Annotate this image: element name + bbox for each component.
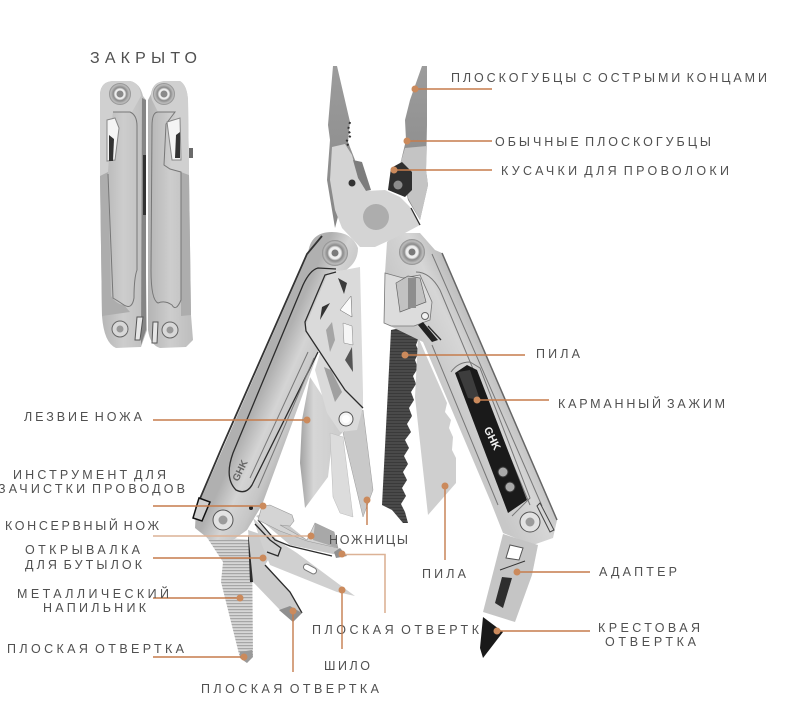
scissors frame [305,267,363,432]
left handle [195,232,358,540]
heading: closed state: ЗАКРЫТО [90,50,197,67]
closed top left rivet [109,83,131,105]
closed left latch [135,317,143,340]
callout: wire stripper: ЗАЧИСТКИ ПРОВОДОВ [0,482,185,496]
right jaw light section [400,146,428,220]
pocket clip [455,365,527,513]
right jaw [400,66,428,220]
closed multitool [100,81,193,348]
saw blade [382,325,419,523]
awl tool [253,518,355,596]
callout: phillips screwdriver [494,621,700,649]
wire cutter [388,162,412,197]
label text under tool: ПЛОСКАЯ ОТВЕРТК [312,623,480,637]
callout: phillips screwdriver: КРЕСТОВАЯ [598,621,700,635]
callout: wire cutters [390,164,729,178]
left base screw and latch [193,498,253,530]
file tool [206,535,253,663]
opened multitool [193,66,557,663]
callout: awl: ШИЛО [324,659,370,673]
callout: adapter [514,565,677,579]
callout: flat screwdriver left: ПЛОСКАЯ ОТВЕРТКА [7,642,185,656]
callout: metal file [17,586,244,615]
callout: serrated blade: ПИЛА [422,567,467,581]
left jaw teeth [346,122,351,148]
callout: scissors [329,496,408,547]
right base screw and latch [520,503,554,532]
callout: bottle opener: ОТКРЫВАЛКА [25,543,141,557]
scissors pivot [339,412,353,426]
closed bottom left screw [112,321,128,337]
clip logo: GHK [481,425,502,452]
serrated blade [415,337,456,515]
callout: regular pliers: ОБЫЧНЫЕ ПЛОСКОГУБЦЫ [495,135,711,149]
saw holder bracket [384,273,438,342]
scissors left blade [330,433,353,517]
callout: wire cutters: КУСАЧКИ ДЛЯ ПРОВОЛОКИ [501,164,729,178]
callout: awl [324,586,370,673]
clip screw one [498,467,508,477]
adapter [483,534,538,622]
callout: knife blade [24,410,310,424]
callout: scissors: НОЖНИЦЫ [329,533,408,547]
callout: can opener: КОНСЕРВНЫЙ НОЖ [5,518,159,533]
callout: pocket clip [474,396,725,411]
closed right half [148,81,193,348]
knife blade [300,377,345,508]
scissors right blade [343,410,373,517]
closed bottom right screw [162,322,178,338]
callout: flat screwdriver bottom: ПЛОСКАЯ ОТВЕРТКА [201,682,380,696]
pliers head [330,144,420,247]
clip screw two [505,482,515,492]
callout: needle nose pliers [412,71,767,92]
callout: knife blade: ЛЕЗВИЕ НОЖА [24,410,143,424]
callout: saw: ПИЛА [536,347,581,361]
callout: wire stripper [0,468,266,510]
flat screwdriver tool [248,530,302,622]
small screwdriver tool [256,510,347,558]
closed top right rivet [153,83,175,105]
callout: flat screwdriver bottom [201,608,380,696]
main pivot left [322,240,348,266]
phillips bit [480,617,503,658]
callout: metal file: МЕТАЛЛИЧЕСКИЙ [17,586,169,601]
left handle logo: GHK [231,458,251,483]
callout: saw [402,347,581,361]
callout: flat screwdriver left [7,642,248,660]
callout: phillips screwdriver: ОТВЕРТКА [605,635,697,649]
callout: bottle opener: ДЛЯ БУТЫЛОК [25,558,143,572]
main pivot right [399,239,425,265]
can opener tool [258,505,338,548]
callout: flat screwdriver right [338,550,385,613]
left jaw [327,66,355,228]
callout: can opener [5,518,314,540]
callout: pocket clip: КАРМАННЫЙ ЗАЖИМ [558,396,725,411]
callout: metal file: НАПИЛЬНИК [43,601,147,615]
callout: serrated blade [422,482,467,581]
callout: bottle opener [25,543,266,572]
callout: needle nose pliers: ПЛОСКОГУБЦЫ С ОСТРЫМИ КОНЦАМИ [451,71,767,85]
closed right latch [152,322,158,343]
closed left half [100,81,147,348]
callout: adapter: АДАПТЕР [599,565,677,579]
callout: wire stripper: ИНСТРУМЕНТ ДЛЯ [13,468,166,482]
right handle [384,233,557,545]
